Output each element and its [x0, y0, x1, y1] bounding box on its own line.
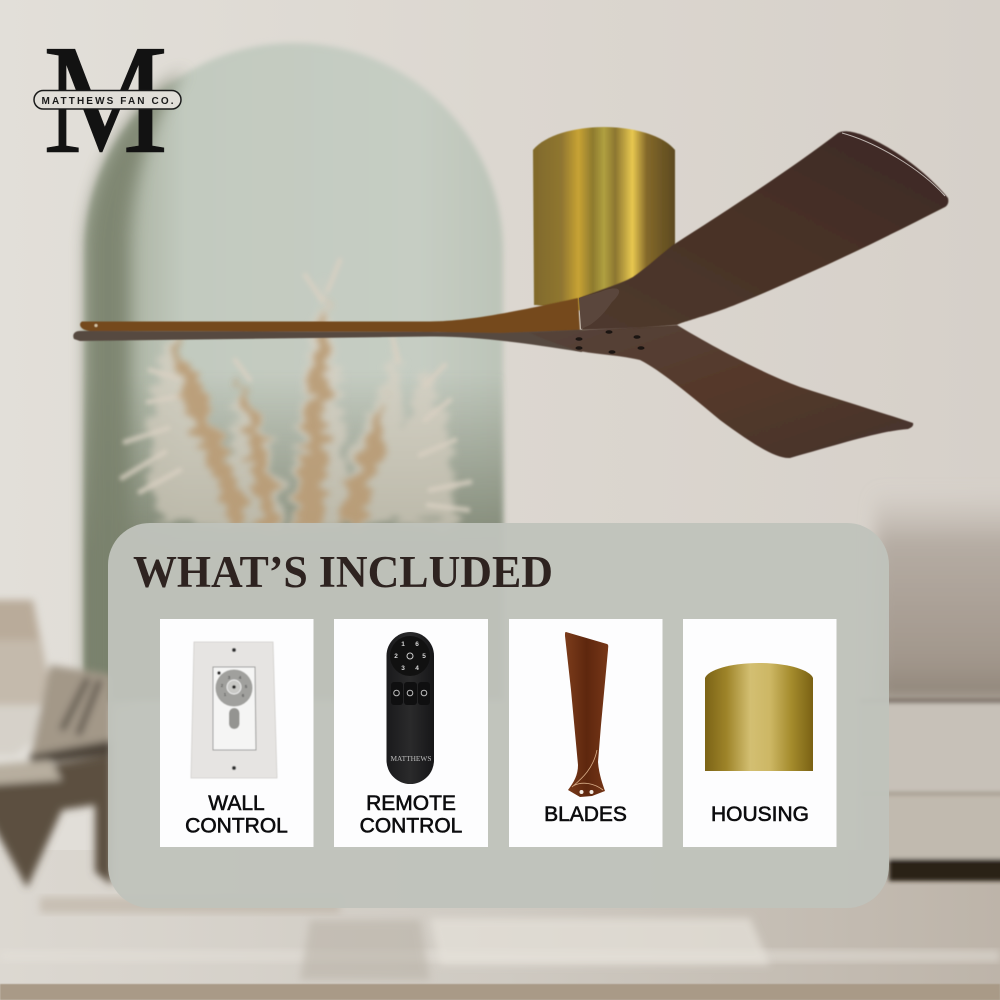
icon: wall control plate: [191, 642, 277, 778]
icon: wall control plate: 2: [221, 683, 224, 688]
icon: wall control plate: 3: [228, 675, 231, 680]
icon: remote: 1: [401, 641, 405, 648]
label: WALL: [208, 792, 265, 815]
card: wall control: [160, 619, 314, 847]
logo wordmark: MATTHEWS FAN CO.: [42, 96, 174, 107]
heading: WHAT’S INCLUDED: [133, 547, 553, 597]
icon: remote: 4: [415, 665, 419, 672]
icon: wall control plate: 1: [224, 692, 227, 697]
blade hub highlight edge: [842, 133, 945, 196]
logo monogram M: M: [43, 12, 168, 186]
icon: remote: 2: [394, 653, 398, 660]
icon: wall control plate: 4: [239, 675, 242, 680]
card: blades: [509, 619, 662, 847]
icon: remote: 3: [401, 665, 405, 672]
icon: remote: [386, 632, 434, 784]
floor: [0, 850, 1000, 1000]
fan blade: long left: [73, 298, 582, 352]
icon: remote: 6: [415, 641, 419, 648]
ceiling fan: [73, 127, 948, 458]
icon: blade: [565, 632, 608, 797]
logo: Matthews Fan Co.: [34, 12, 181, 186]
label: BLADES: [544, 803, 627, 826]
label: REMOTE: [366, 792, 456, 815]
icon: remote: MATTHEWS: [390, 755, 432, 763]
pampas grass: [122, 260, 470, 525]
panel: what's included: [108, 523, 889, 908]
icon: housing cylinder: [705, 663, 813, 771]
icon: remote: 5: [422, 653, 426, 660]
panel background: [108, 523, 889, 908]
sofa right: [860, 490, 1000, 881]
mounting holes: [576, 330, 644, 354]
card: housing: [683, 619, 836, 847]
fan blade: upper right: [579, 131, 948, 330]
sofa left and throw blanket: [0, 600, 112, 888]
logo pill: [34, 90, 181, 109]
arch niche: [85, 43, 503, 700]
fan blade: lower right: [530, 325, 913, 458]
card: remote control: [334, 619, 488, 847]
blade hub shading: [579, 288, 619, 329]
icon: wall control plate: 5: [245, 684, 248, 689]
icon: wall control plate: 6: [242, 693, 245, 698]
label: HOUSING: [711, 803, 809, 826]
fan housing: brass cylinder: [533, 127, 675, 310]
label: CONTROL: [185, 814, 288, 838]
label: CONTROL: [360, 814, 462, 838]
